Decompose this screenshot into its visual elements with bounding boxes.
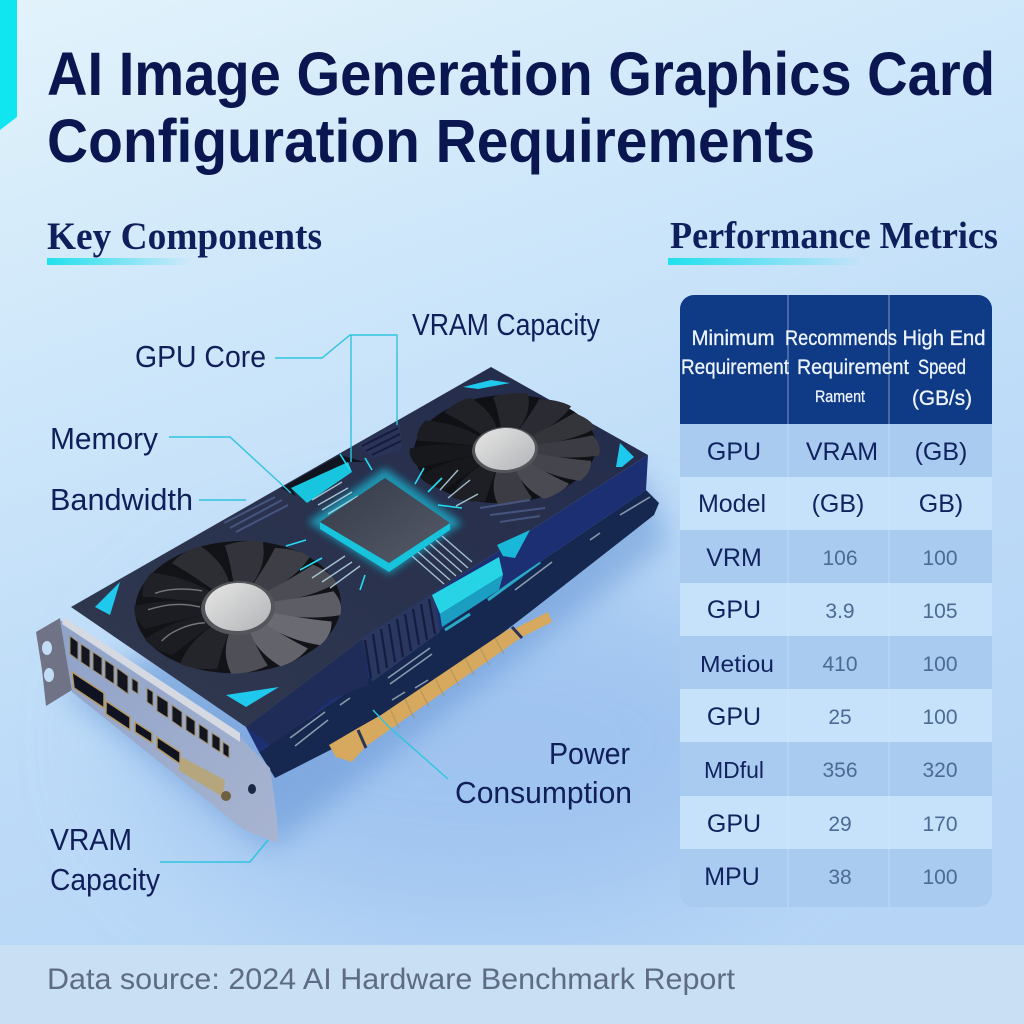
rear rib block [357, 422, 402, 458]
row labels: Metiou [700, 651, 774, 677]
row values: 105 [922, 600, 958, 623]
title: Configuration Requirements [47, 107, 815, 175]
row labels: (GB) [915, 438, 967, 466]
gold connector [329, 612, 552, 762]
bracket ports [72, 672, 180, 764]
fan: front [129, 536, 345, 680]
bracket vents [70, 636, 229, 758]
performance table [680, 295, 992, 907]
label: VRAM: VRAM [50, 822, 132, 857]
header text: Requirement [681, 356, 789, 379]
row values: 25 [828, 706, 852, 729]
header text: (GB/s) [912, 387, 972, 410]
row values: 38 [828, 866, 852, 889]
label: GPU core: GPU Core [135, 339, 266, 374]
row labels: GPU [707, 596, 761, 624]
callout labels [50, 307, 632, 897]
row values: 320 [922, 759, 958, 782]
board components [290, 497, 650, 746]
table rows [680, 424, 992, 907]
header text: Minimum [692, 327, 774, 350]
label: consumption: Consumption [455, 775, 632, 810]
row labels: MPU [704, 863, 760, 891]
table header [680, 295, 992, 424]
row labels: GPU [707, 810, 761, 838]
row labels: GB) [919, 490, 963, 518]
row values: 106 [822, 547, 858, 570]
row labels: (GB) [812, 490, 864, 518]
row values: 100 [922, 547, 958, 570]
label: memory: Memory [50, 421, 158, 456]
row labels: GPU [707, 438, 761, 466]
graphics card illustration [36, 367, 670, 850]
label: capacity: Capacity [50, 862, 160, 897]
header text [681, 327, 986, 410]
label: power: Power [549, 736, 630, 771]
chip glow [308, 468, 462, 574]
row labels: GPU [707, 703, 761, 731]
label: bandwidth: Bandwidth [50, 482, 193, 517]
footer source text: Data source: 2024 AI Hardware Benchmark Report [47, 963, 736, 996]
leader lines [160, 335, 448, 862]
heading: performance metrics: Performance Metrics [670, 215, 998, 257]
cyan memory block: upper [291, 462, 352, 503]
row labels: Model [698, 490, 766, 518]
row labels: VRAM [806, 438, 878, 466]
heading: key components: Key Components [47, 215, 322, 258]
cyan accents on shroud [95, 380, 634, 707]
footer band [0, 945, 1024, 1024]
header text: Recommends [785, 327, 897, 350]
chip traces [312, 470, 478, 588]
row values: 100 [922, 653, 958, 676]
row values: 29 [828, 813, 852, 836]
corner accent [0, 0, 17, 130]
row values: 3.9 [825, 600, 855, 623]
row values: 356 [822, 759, 858, 782]
row values: 100 [922, 866, 958, 889]
title [47, 40, 995, 175]
header text: Requirement [797, 356, 909, 379]
label: VRAM capacity top: VRAM Capacity [412, 307, 600, 342]
fan: rear [405, 389, 603, 511]
cyan memory block: lower [432, 557, 503, 627]
header text: Rament [815, 387, 865, 406]
row values [822, 547, 958, 889]
bracket [36, 617, 278, 843]
row values: 170 [922, 813, 958, 836]
rib details [224, 497, 545, 532]
circuit board [259, 490, 659, 778]
row labels: VRM [706, 544, 762, 572]
row labels [698, 438, 967, 891]
rear cyan block [497, 530, 530, 558]
shroud side [246, 455, 648, 752]
row labels: MDful [704, 757, 764, 783]
GPU chip [320, 478, 450, 572]
shroud top [71, 367, 648, 727]
dark slot above memory block [281, 455, 365, 496]
header text: Speed [918, 356, 966, 379]
header text: High End [902, 327, 986, 350]
heatsink fins [362, 592, 440, 682]
row values: 100 [922, 706, 958, 729]
row values: 410 [822, 653, 858, 676]
